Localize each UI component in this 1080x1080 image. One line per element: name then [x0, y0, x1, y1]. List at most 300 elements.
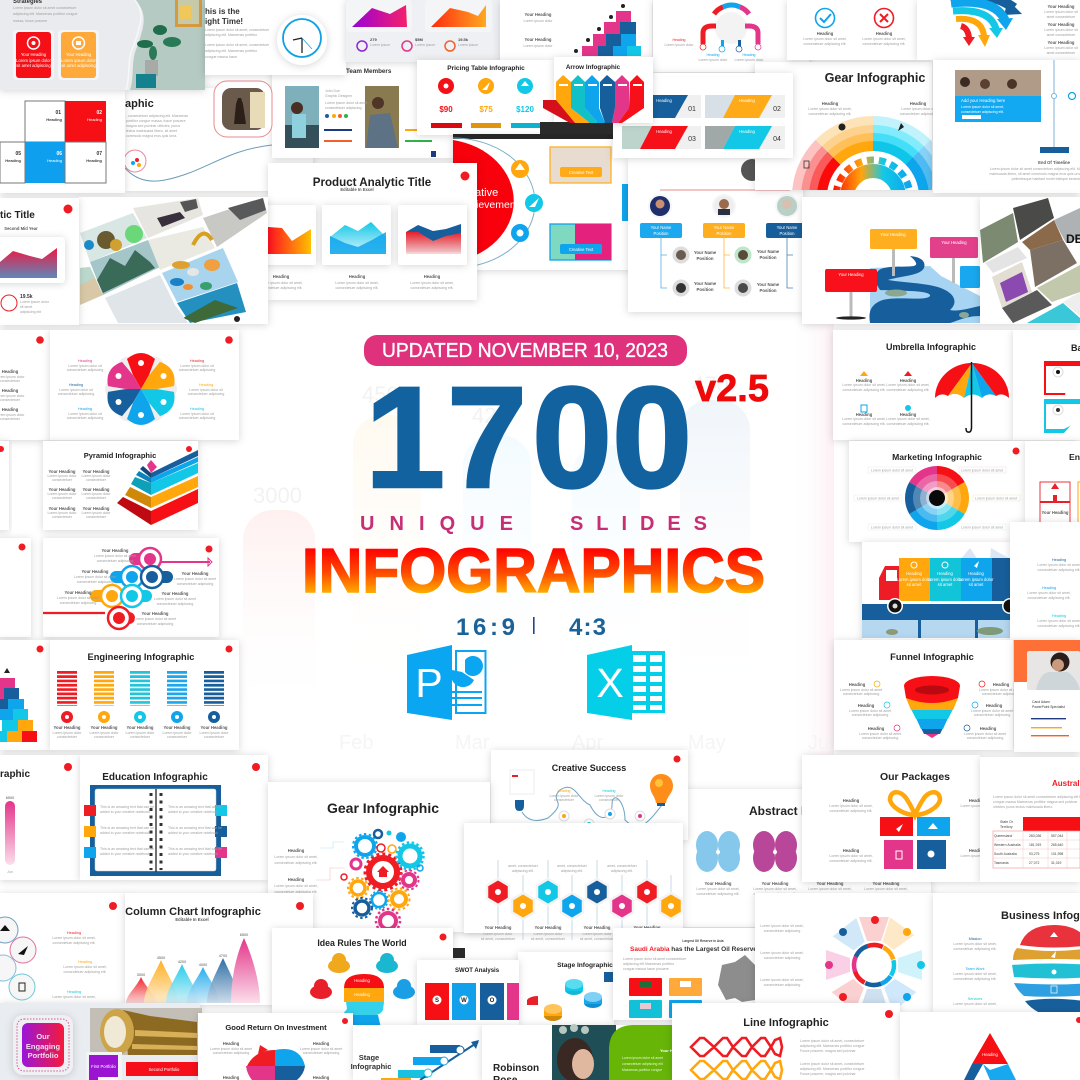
panel: engineering boxes right: Your Heading: [1042, 510, 1069, 515]
panel: business infographic: consectetuer adipiscing elit.: [954, 977, 997, 981]
panel: marketing infographic: Lorem ipsum dolor sit amet: [961, 526, 1003, 530]
table: state data: 101,998: [1051, 852, 1063, 856]
panel: numbered quadrant slide: 07: [96, 151, 102, 157]
panel: snake timeline: Your Heading: [102, 548, 129, 553]
panel: numbered quadrant slide: [0, 90, 125, 193]
panel: product analytic title: Lorem ipsum dolor sit amet,: [259, 281, 303, 285]
icon: open notebook: added to your creative notebook: [100, 810, 150, 814]
panel: engineering infographic: Your Heading: [127, 725, 154, 730]
chart: sliced sphere: [1012, 925, 1080, 1013]
panel: image ribbons 01-04: [613, 73, 793, 158]
panel: gear semicircle infographic: Gear Infographic: [825, 71, 925, 85]
panel: pyramid infographic: Lorem ipsum dolor: [48, 474, 77, 478]
panel: pyramid infographic: consectetuer: [86, 515, 107, 519]
background: faded column chart: 450: [362, 382, 399, 407]
panel: SWOT analysis: [417, 960, 519, 1025]
panel: timeline slide: Add your Heading here: [961, 98, 1006, 103]
panel: snake timeline: consectetuer adipiscing: [77, 580, 113, 584]
panel: heading list right: Lorem ipsum dolor sit amet,: [1037, 619, 1080, 623]
card: red heading: [13, 30, 54, 80]
chart: teardrop columns: [126, 933, 260, 1003]
panel: pyramid infographic: Your Heading: [83, 469, 110, 474]
panel: engineering infographic: Engineering Infographic: [88, 652, 194, 662]
panel: rainbow arrows: amet consectetuer: [1047, 15, 1076, 19]
chart: SWOT columns: O: [490, 998, 495, 1004]
subtitle: unique slides: [360, 513, 707, 535]
panel: business infographic: Lorem ipsum dolor sit amet,: [953, 942, 997, 946]
panel: flower infographic: consectetuer adipiscing: [58, 392, 94, 396]
panel: funnel infographic: Heading: [980, 726, 997, 731]
panel: robinson rose profile: consectetuer adipiscing elit: [622, 1062, 663, 1066]
panel: pyramid infographic: Lorem ipsum dolor: [48, 511, 77, 515]
table: state data: Territory: [1000, 825, 1013, 829]
card: our engaging portfolio: [13, 1015, 73, 1075]
panel: hexagon process: Lorem ipsum dolor: [534, 932, 563, 936]
chart: teardrop columns: 3000: [137, 973, 145, 977]
panel: engineering infographic: [50, 640, 239, 750]
panel: business infographic: Lorem ipsum dolor sit amet,: [953, 972, 997, 976]
panel: engineering infographic: consectetuer: [130, 735, 151, 739]
panel: small slide edge: [0, 441, 9, 530]
panel: stair infographic: Your Heading: [525, 12, 552, 17]
panel: creative success: Lorem ipsum dolor: [595, 794, 624, 798]
panel: rainbow arrows: amet consectetuer: [1047, 51, 1076, 55]
panel: funnel infographic: Lorem ipsum dolor sit amet: [849, 709, 891, 713]
icon: truck: Lorem ipsum dolor: [959, 577, 994, 582]
panel: abstract infographic: Your Heading: [873, 881, 900, 886]
panel: left circles: Lorem ipsum dolor sit amet,: [63, 965, 107, 969]
panel: funnel infographic: Heading: [858, 703, 875, 708]
panel: process arc infographic: Heading: [672, 38, 686, 42]
panel: business infographic: consectetuer adipiscing elit.: [954, 947, 997, 951]
panel: creative success: Heading: [602, 789, 616, 793]
panel: right time clock slide: adipiscing elit. Maecenas porttitor: [205, 33, 258, 37]
card: second portfolio: [126, 1062, 200, 1076]
table: state data: 27,072: [1029, 861, 1039, 865]
panel: snake timeline: Lorem ipsum dolor sit amet: [74, 575, 116, 579]
icon: open notebook: This is an amazing text that can be: [100, 847, 154, 851]
icon: truck: sit amet: [907, 582, 922, 587]
panel: funnel infographic: Lorem ipsum dolor sit amet: [979, 688, 1021, 692]
panel: process arc infographic: [653, 0, 809, 72]
chart: funnel: [904, 676, 960, 738]
panel: heading list right: consectetuer adipiscing elit.: [1028, 596, 1071, 600]
panel: image ribbons 01-04: 01: [688, 106, 696, 113]
subtitle: unique slides: SLIDES: [570, 513, 707, 535]
panel: abstract infographic: Lorem ipsum dolor sit amet,: [864, 887, 908, 891]
panel: engineering infographic: Your Heading: [54, 725, 81, 730]
panel: pyramid infographic: Lorem ipsum dolor: [82, 492, 111, 496]
panel: heading list right: Lorem ipsum dolor sit amet,: [1027, 591, 1071, 595]
panel: robinson rose profile: Robinson: [493, 1063, 539, 1074]
panel: numbered quadrant slide: Heading: [86, 158, 103, 163]
panel: abstract infographic: consectetuer adipiscing elit.: [754, 892, 797, 896]
panel: gear head infographic: Lorem ipsum dolor sit amet,: [274, 884, 318, 888]
panel: line infographic: Fusce posuere, magna sed pulvinar: [800, 1049, 856, 1053]
icon: light bulb: [650, 774, 673, 806]
panel: left circles: consectetuer adipiscing elit.: [52, 941, 96, 945]
panel: neumorphic area charts: Lorem ipsum: [458, 43, 478, 47]
panel: stage infographic bottom: Stage: [359, 1053, 379, 1062]
icon: Excel: X: [596, 660, 624, 706]
background: faded column chart: May: [688, 732, 726, 754]
chart: flower: [103, 353, 179, 425]
card: our engaging portfolio: Engaging: [26, 1042, 60, 1051]
panel: timeline slide: [933, 60, 1080, 193]
aspect ratios: 4:3: [569, 614, 606, 641]
panel: umbrella infographic: Lorem ipsum dolor sit amet,: [886, 417, 930, 421]
panel: pyramid infographic: Your Heading: [49, 506, 76, 511]
panel: flower infographic: Heading: [78, 407, 92, 411]
panel: robinson rose profile: Lorem ipsum dolor sit amet: [622, 1056, 663, 1060]
icon: open notebook: added to your creative notebook: [168, 810, 218, 814]
panel: abstract infographic: [681, 789, 931, 927]
panel: hexagon process: adipiscing elit.: [561, 869, 583, 873]
panel: funnel infographic: consectetuer adipiscing: [982, 692, 1018, 696]
panel: hexagon process: adipiscing elit.: [512, 869, 534, 873]
panel: rainbow arrows: Your Heading: [1048, 4, 1075, 9]
icon: open notebook: This is an amazing text that can be: [100, 826, 154, 830]
panel: abstract infographic: Abstract In: [749, 804, 812, 818]
panel: heading list right: Heading: [1042, 586, 1056, 590]
panel: flower infographic: consectetuer adipiscing: [179, 368, 215, 372]
panel: org chart: Position: [760, 288, 777, 293]
panel: neumorphic area charts: 19.5k: [458, 37, 469, 42]
panel: snake timeline: Lorem ipsum dolor sit amet: [57, 596, 99, 600]
panel: pyramid infographic: consectetuer: [86, 478, 107, 482]
panel: australia table: ultricies purus lectus malesuada libero: [993, 805, 1052, 809]
org chart: name boxes: Your Name: [651, 225, 672, 230]
panel: engineering infographic: Lorem ipsum dolor: [126, 731, 155, 735]
panel: game infographic slide: lectus malesuada libero, sit amet: [126, 129, 177, 133]
panel: rainbow arrows: Your Heading: [1048, 40, 1075, 45]
panel: hexagon process: amet, consectetuer: [607, 864, 638, 868]
panel: arrow infographic: [540, 57, 653, 134]
panel: hexagon process: sit amet, consectetuer: [580, 937, 615, 941]
icon: open notebook: added to your creative notebook: [100, 831, 150, 835]
panel: product analytic title: Lorem ipsum dolor sit amet,: [335, 281, 379, 285]
panel: umbrella infographic: consectetuer adipiscing elit.: [886, 422, 930, 426]
panel: engineering infographic: Your Heading: [91, 725, 118, 730]
card: orange heading: Lorem ipsum dolor: [61, 58, 96, 63]
background: faded column chart: Jun: [808, 732, 840, 754]
panel: left circles: consectetuer adipiscing elit.: [64, 970, 107, 974]
icon: open notebook: This is an amazing text that can be: [168, 826, 222, 830]
panel: engineering infographic: Lorem ipsum dolor: [53, 731, 82, 735]
panel: gear semicircle infographic: Lorem ipsum dolor sit: [901, 107, 935, 111]
panel: umbrella infographic: consectetuer adipiscing elit.: [842, 388, 886, 392]
panel: stair infographic: [500, 0, 652, 62]
panel: robinson rose profile: Maecenas porttitor congue: [622, 1068, 662, 1072]
icon: truck: Heading: [906, 571, 922, 576]
panel: snake timeline: consectetuer adipiscing: [97, 559, 133, 563]
panel: engineering infographic: consectetuer: [204, 735, 225, 739]
panel: gear head infographic: [268, 782, 490, 933]
panel: abstract infographic: Lorem ipsum dolor sit amet,: [696, 887, 740, 891]
panel: creative success: consectetuer: [599, 798, 620, 802]
panel: neumorphic area charts: Lorem ipsum: [415, 43, 435, 47]
panel: arrow infographic: Arrow Infographic: [566, 64, 621, 71]
panel: strategies slide with plant photo: massa, fusce posuere: [13, 19, 47, 23]
panel: rainbow arrows: Lorem ipsum dolor sit: [1044, 46, 1078, 50]
panel: snake timeline: Lorem ipsum dolor sit amet: [94, 554, 136, 558]
panel: left heading list: consectetuer: [0, 398, 21, 402]
panel: stage infographic bottom: Infographic: [351, 1062, 391, 1071]
org chart: name boxes: Position: [654, 231, 669, 236]
version tag: v2.5: [695, 368, 769, 410]
panel: hexagon process: Your Heading: [485, 925, 512, 930]
panel: column chart infographic: Editable In Excel: [175, 917, 209, 922]
panel: product analytic title: Editable In Excel: [340, 187, 374, 192]
background: faded column chart: Apr: [572, 732, 603, 754]
panel: hexagon process: sit amet, consectetuer: [531, 937, 566, 941]
panel: strategies slide with plant photo: Lorem ipsum dolor sit amet consectetuer: [13, 6, 77, 10]
panel: numbered quadrant slide: 05: [15, 151, 21, 157]
panel: hexagon photo collage right: [980, 197, 1080, 324]
card: creative text top: Creative Text: [569, 170, 594, 175]
chart: river road: [869, 256, 980, 323]
panel: our packages: Lorem ipsum dolor: [961, 854, 990, 858]
panel: idea rules the world: [272, 928, 465, 1028]
panel: second mid year analytic: Lorem ipsum dolor: [20, 300, 50, 304]
panel: snake timeline: [43, 538, 219, 637]
panel: numbered quadrant slide: 02: [96, 110, 102, 116]
panel: saudi arabia map: congue massa fusce posuere: [623, 967, 669, 971]
card: creative text top: [550, 147, 611, 183]
panel: hexagon process: adipiscing elit.: [611, 869, 633, 873]
panel: good return on investment: Lorem ipsum dolor sit amet: [300, 1047, 342, 1051]
panel: hexagon process: Your Heading: [584, 925, 611, 930]
panel: product analytic title: Heading: [273, 274, 290, 279]
panel: left heading list: Heading: [2, 407, 19, 412]
chart: SWOT columns: [425, 983, 519, 1020]
panel: segmented ring infographic: [755, 893, 933, 1013]
panel: product analytic title: consectetuer adipiscing elit.: [260, 286, 303, 290]
panel: saudi arabia map: Saudi Arabia has the Largest Oil Reserve in Asia: [630, 946, 780, 953]
background: faded column chart: Mar: [455, 732, 490, 754]
panel: flower infographic: Lorem ipsum dolor sit: [68, 364, 102, 368]
panel: our packages: Lorem ipsum dolor sit amet,: [829, 804, 873, 808]
chart: colored coil springs: [67, 671, 214, 706]
panel: umbrella infographic: Heading: [856, 378, 873, 383]
icon: truck: Heading: [968, 571, 984, 576]
panel: numbered quadrant slide: 01: [55, 110, 61, 116]
panel: business infographic: Team Work: [965, 967, 985, 971]
panel: check and cross comparison: consectetuer adipiscing elit.: [804, 42, 847, 46]
card: red heading: Your Heading: [21, 52, 47, 57]
panel: umbrella infographic: Heading: [856, 412, 873, 417]
icon: truck: sit amet: [938, 582, 953, 587]
panel: org chart: Your Name: [694, 250, 717, 255]
table: state data: 31,019: [1051, 861, 1061, 865]
update badge: UPDATED NOVEMBER 10, 2023: [382, 340, 668, 362]
card: our engaging portfolio: Portfolio: [28, 1051, 59, 1060]
panel: creative success: consectetuer: [554, 798, 575, 802]
panel: timeline slide: Lorem ipsum dolor sit amet,: [961, 105, 1004, 109]
panel: game infographic slide: aphic: [125, 98, 154, 110]
panel: strategies slide with plant photo: [0, 0, 205, 90]
icon: open notebook: This is an amazing text that can be: [168, 805, 222, 809]
panel: team members: John Doe: [325, 89, 340, 93]
org chart: top avatars: [648, 194, 799, 218]
chart: orange diamond chain: [691, 1061, 782, 1079]
icon: gift box: [880, 792, 950, 869]
panel: org chart: Your Name: [757, 249, 780, 254]
panel: profile card: Carol Adam: [1032, 700, 1050, 704]
panel: org chart: Your Name: [694, 281, 717, 286]
panel: line infographic: Fusce posuere, magna sed pulvinar: [800, 1072, 856, 1076]
card: orange heading: sit amet adipiscing: [61, 63, 96, 68]
card: first portfolio: [86, 1052, 122, 1080]
panel: flower infographic: Lorem ipsum dolor sit: [59, 388, 93, 392]
panel: robinson rose profile: Your Hea: [660, 1048, 678, 1053]
panel: snake timeline: Your Heading: [65, 590, 92, 595]
panel: snake timeline: Your Heading: [142, 611, 169, 616]
table: state data: 557,044: [1051, 834, 1063, 838]
panel: abstract infographic: Your Heading: [817, 881, 844, 886]
panel: umbrella infographic: consectetuer adipiscing elit.: [842, 422, 886, 426]
icon: truck: Heading: [937, 571, 953, 576]
panel: business infographic: Lorem ipsum dolor sit amet,: [953, 1002, 997, 1006]
org chart: name boxes: Your Name: [777, 225, 798, 230]
chart: hexagon row: [487, 879, 682, 919]
card: orange heading: [58, 30, 99, 80]
panel: numbered quadrant slide: Heading: [5, 158, 22, 163]
panel: robinson rose profile: [482, 1024, 678, 1080]
panel: road sign infographic: [802, 197, 980, 324]
panel: left heading list: consectetuer: [0, 379, 21, 383]
panel: education infographic: Education Infographic: [102, 772, 208, 783]
panel: product analytic title: Heading: [349, 274, 366, 279]
panel: timeline slide: consectetuer adipiscing elit.: [961, 110, 1004, 114]
panel: rainbow arrows: amet consectetuer: [1047, 33, 1076, 37]
chart: red diamond chain: [691, 1038, 782, 1056]
icon: clock: [277, 15, 327, 65]
panel: right time clock slide: his is the: [205, 7, 240, 16]
panel: business infographic: [933, 893, 1080, 1013]
background: faded column chart: 420: [472, 403, 509, 428]
panel: pyramid infographic: Your Heading: [49, 487, 76, 492]
panel: our packages: Our Packages: [880, 771, 950, 783]
panel: segmented ring infographic: Lorem ipsum dolor sit amet,: [760, 978, 804, 982]
table: state data: Tasmania: [994, 861, 1009, 865]
panel: flower infographic: Heading: [78, 359, 92, 363]
panel: saudi arabia map: Lorem ipsum dolor sit amet consectetuer: [623, 957, 687, 961]
panel: product analytic title: [246, 163, 477, 300]
panel: second mid year analytic: adipiscing elit: [20, 310, 41, 314]
panel: creative success: Heading: [557, 789, 571, 793]
panel: numbered quadrant slide: Heading: [47, 158, 62, 163]
panel: stair infographic: Lorem ipsum dolor: [524, 19, 553, 23]
card: our engaging portfolio: Our: [36, 1032, 50, 1041]
panel: numbered quadrant slide: 06: [56, 151, 62, 157]
table: state data: 93,275: [1029, 852, 1039, 856]
sign: orange: [870, 229, 917, 276]
panel: funnel infographic: consectetuer adipiscing: [967, 736, 1003, 740]
panel: engineering infographic: consectetuer: [167, 735, 188, 739]
panel: image ribbons 01-04: Heading: [656, 129, 672, 134]
panel: hexagon process: [464, 823, 683, 941]
chart: SWOT columns: S: [435, 998, 439, 1004]
panel: chess picture frame: [214, 81, 272, 137]
panel: right time clock slide: Lorem ipsum dolor sit amet, consectetuer: [205, 28, 270, 32]
panel: pyramid infographic: consectetuer: [86, 496, 107, 500]
panel: second mid year analytic: sit amet: [20, 305, 32, 309]
panel: business infographic: Services: [968, 997, 982, 1001]
panel: second mid year analytic: [0, 198, 79, 325]
panel: rainbow arrows: [917, 0, 1080, 60]
panel: segmented ring infographic: consectetuer adipiscing: [764, 983, 800, 987]
panel: flower infographic: Heading: [69, 383, 83, 387]
panel: team members: Lorem ipsum dolor sit amet: [325, 101, 367, 105]
panel: right time clock slide: congue massa fusce: [205, 55, 237, 59]
panel: line infographic: adipiscing elit. Maecenas porttitor congue: [800, 1044, 864, 1048]
map: Asia silhouette: [718, 955, 782, 1002]
panel: funnel infographic: Lorem ipsum dolor sit amet: [971, 709, 1013, 713]
panel: funnel infographic: Heading: [986, 703, 1003, 708]
panel: small slide edge mid-left: [0, 538, 31, 637]
panel: gear head infographic: consectetuer adipiscing elit.: [274, 861, 318, 865]
panel: process arc infographic: Heading: [742, 53, 756, 57]
panel: team members: Graphic Designer: [325, 94, 353, 98]
panel: check and cross comparison: Heading: [876, 31, 893, 36]
panel: funnel infographic: Lorem ipsum dolor sit amet: [840, 688, 882, 692]
panel: product analytic title: consectetuer adipiscing elit.: [410, 286, 454, 290]
panel: left heading list: consectetuer: [0, 417, 21, 421]
panel: portfolio neumorphic: [0, 1003, 202, 1080]
panel: funnel infographic: consectetuer adipiscing: [974, 713, 1010, 717]
panel: left circles: [0, 893, 126, 1005]
panel: good return on investment: Lorem ipsum dolor sit amet: [210, 1047, 252, 1051]
panel: stage infographic bottom: [351, 1025, 483, 1080]
panel: creative achievements: ative: [475, 187, 498, 199]
panel: team members: [272, 62, 453, 158]
panel: creative achievements: ievements: [476, 199, 524, 211]
panel: marketing infographic: [849, 441, 1025, 542]
panel: product analytic title: Product Analytic Title: [313, 176, 432, 189]
panel: good return on investment: Heading: [223, 1041, 240, 1046]
panel: funnel infographic: Lorem ipsum dolor sit amet: [859, 732, 901, 736]
icon: rainbow gear: [836, 160, 910, 234]
panel: education infographic: [80, 755, 268, 880]
title: infographics: INFOGRAPHICS: [302, 537, 765, 606]
panel: funnel infographic: Funnel Infographic: [890, 652, 974, 662]
panel: flower infographic: Lorem ipsum dolor sit: [180, 364, 214, 368]
panel: hexagon process: Lorem ipsum dolor: [633, 932, 662, 936]
icon: PowerPoint: P: [415, 660, 443, 706]
panel: neumorphic area charts: [346, 0, 501, 62]
aspect ratios: [456, 614, 606, 641]
panel: gauge bar slide: 6500: [6, 796, 14, 800]
panel: team members: consectetuer adipiscing: [325, 106, 362, 110]
panel: gauge bar slide: [0, 755, 80, 880]
icon: pricing circles: [438, 78, 533, 94]
panel: snake timeline: Your Heading: [182, 571, 209, 576]
panel: segmented ring infographic: Lorem ipsum dolor sit amet,: [760, 924, 804, 928]
panel: game infographic slide: , consectetuer adipiscing elit. Maecenas: [126, 114, 188, 118]
org chart: name boxes: Position: [780, 231, 795, 236]
panel: umbrella infographic: Lorem ipsum dolor sit amet,: [842, 417, 886, 421]
panel: product analytic title: consectetuer adipiscing elit.: [336, 286, 379, 290]
panel: game infographic slide: commodo magna eros quis urna.: [126, 134, 177, 138]
panel: good return on investment: consectetuer adipiscing: [303, 1051, 339, 1055]
panel: gear head infographic: Heading: [288, 848, 305, 853]
panel: marketing infographic: Lorem ipsum dolor sit amet: [871, 468, 913, 472]
panel: profile card: [1014, 640, 1080, 752]
panel: abstract infographic: Your Heading: [762, 881, 789, 886]
icon: open notebook: added to your creative notebook: [168, 852, 218, 856]
table: state data: Queensland: [994, 834, 1012, 838]
